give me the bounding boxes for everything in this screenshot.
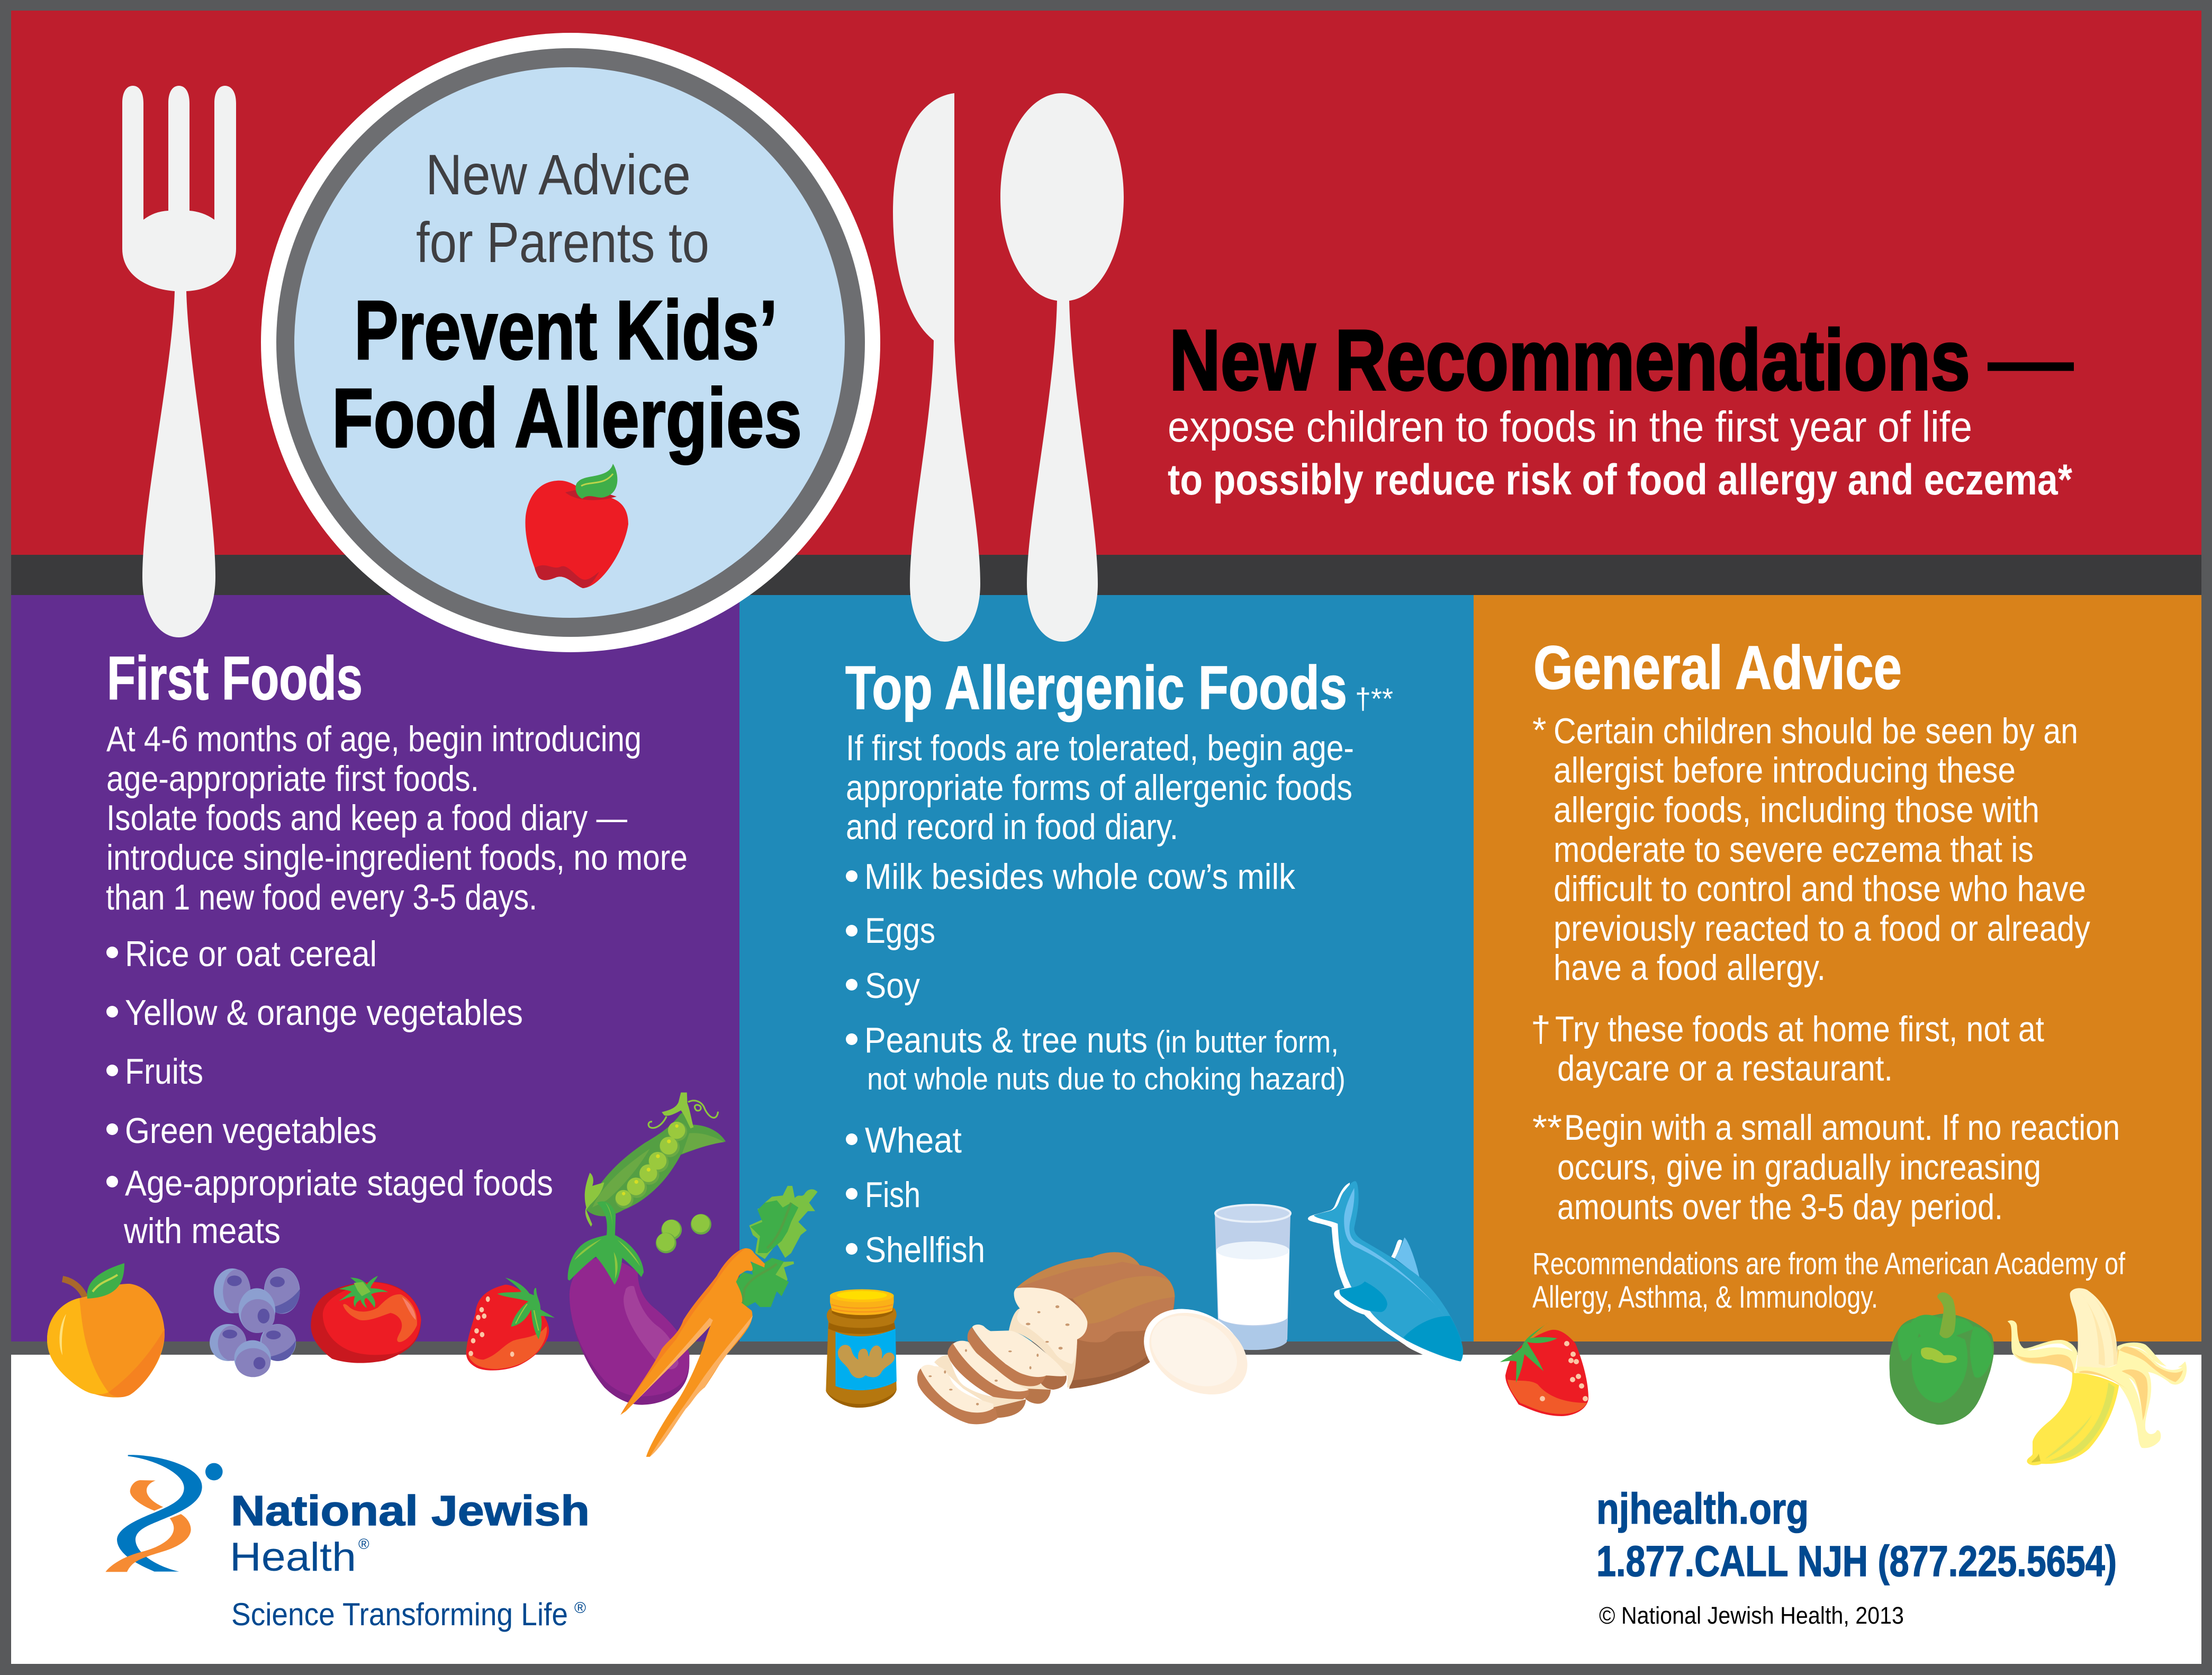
plate title: bold lines: Prevent Kids’	[354, 284, 778, 377]
contact block	[1596, 1485, 2117, 1629]
icon: banana	[2008, 1288, 2187, 1465]
note: certain children: allergist before introducing these	[1554, 750, 2016, 790]
logo mark	[105, 1455, 223, 1572]
note: certain children: previously reacted to a food or already	[1554, 908, 2090, 949]
subheading: to possibly reduce risk of food allergy and eczema*	[1168, 456, 2072, 504]
note: try at home: †	[1531, 1009, 1551, 1049]
icon: apple	[525, 464, 628, 588]
bullet list: allergenic foods	[846, 857, 1346, 1270]
panel: general advice text	[1531, 633, 2126, 1314]
bullet list: allergenic foods: Milk besides whole cow’s milk	[864, 857, 1296, 897]
intro paragraph: and record in food diary.	[846, 807, 1178, 847]
bullet list: first foods: Green vegetables	[125, 1111, 377, 1151]
note: certain children	[1532, 710, 2090, 988]
intro paragraph: If first foods are tolerated, begin age-	[846, 728, 1354, 768]
panel background: general advice	[1474, 595, 2201, 1341]
note: try at home	[1531, 1009, 2044, 1088]
panel: first foods text	[106, 644, 688, 1251]
bullet list: first foods: Fruits	[125, 1051, 203, 1092]
bullet list: allergenic foods: not whole nuts due to choking hazard)	[867, 1062, 1346, 1096]
logo: national jewish health	[105, 1455, 590, 1632]
footer white area	[11, 1355, 2201, 1664]
icon: glass of milk	[1215, 1205, 1290, 1350]
icon: strawberry	[466, 1277, 555, 1371]
bullet list: first foods: Rice or oat cereal	[125, 934, 377, 974]
logo wordmark: National Jewish	[231, 1487, 590, 1534]
icon: peach	[47, 1263, 165, 1398]
note: certain children: moderate to severe eczema that is	[1554, 830, 2034, 870]
note: try at home: Try these foods at home first, not at	[1555, 1009, 2044, 1049]
bullet list: allergenic foods: Soy	[865, 966, 920, 1006]
icon: peanut butter jar	[826, 1289, 897, 1408]
tagline: Science Transforming Life	[231, 1597, 568, 1632]
panel: top allergenic foods text	[845, 653, 1393, 1270]
bullet list: allergenic foods: Eggs	[865, 911, 935, 951]
icon: carrot greens	[735, 1186, 817, 1308]
icon: egg	[1129, 1292, 1261, 1411]
panel background: first foods	[11, 595, 739, 1341]
icon: eggplant	[568, 1201, 689, 1405]
icon: pea pod	[585, 1093, 726, 1227]
logo wordmark second line: ®	[358, 1536, 369, 1552]
icon: fish	[1308, 1181, 1463, 1362]
bullet list: allergenic foods: Wheat	[865, 1120, 962, 1160]
intro paragraph: At 4-6 months of age, begin introducing	[106, 719, 642, 759]
header band: red	[11, 11, 2201, 555]
note: certain children: Certain children should be seen by an	[1554, 711, 2078, 751]
icon: knife	[893, 93, 980, 642]
note: certain children: *	[1532, 710, 1546, 750]
intro paragraph	[106, 719, 688, 917]
note: begin small: amounts over the 3-5 day period.	[1557, 1187, 2003, 1227]
icon: blueberries	[210, 1268, 300, 1377]
note: certain children: difficult to control and those who have	[1554, 869, 2086, 909]
icon: spoon	[1000, 93, 1124, 642]
source note: Allergy, Asthma, & Immunology.	[1532, 1280, 1878, 1314]
note: certain children: allergic foods, including those with	[1554, 790, 2039, 830]
icon: carrots	[620, 1248, 765, 1457]
plate title: bold lines: Food Allergies	[332, 372, 802, 465]
source note	[1532, 1247, 2126, 1314]
logo wordmark second line: Health	[230, 1535, 356, 1580]
heading: new recommendations: —	[1988, 312, 2074, 408]
heading: first foods: First Foods	[107, 644, 363, 713]
intro paragraph: appropriate forms of allergenic foods	[846, 768, 1352, 808]
heading: new recommendations: New Recommendations	[1169, 312, 1970, 408]
icon: bread slices	[917, 1325, 1067, 1424]
panel background: top allergenic foods	[739, 595, 1474, 1341]
icon: green pepper	[1890, 1292, 1994, 1425]
subheading: expose children to foods in the first year of life	[1168, 403, 1972, 451]
bullet list: first foods	[106, 934, 553, 1251]
intro paragraph	[846, 728, 1354, 847]
note: try at home: daycare or a restaurant.	[1557, 1048, 1893, 1088]
bullet list: first foods: Yellow & orange vegetables	[125, 993, 523, 1033]
intro paragraph: introduce single-ingredient foods, no more	[106, 837, 688, 878]
note: begin small: **	[1532, 1107, 1562, 1148]
plate title: regular lines: New Advice	[426, 142, 691, 206]
subheading	[1168, 403, 2072, 504]
copyright: © National Jewish Health, 2013	[1599, 1602, 1904, 1629]
heading: top allergenic foods: Top Allergenic Foods	[845, 653, 1347, 722]
bullet list: first foods: Age-appropriate staged foods	[125, 1163, 553, 1203]
bullet list: allergenic foods: (in butter form,	[1155, 1025, 1339, 1059]
intro paragraph: than 1 new food every 3-5 days.	[106, 877, 537, 917]
note: begin small: Begin with a small amount. If no reaction	[1564, 1107, 2120, 1148]
note: begin small: occurs, give in gradually increasing	[1557, 1147, 2041, 1187]
plate title: regular lines	[416, 142, 709, 274]
tagline: ®	[574, 1599, 586, 1617]
icon: fork	[122, 86, 236, 637]
plate with title	[261, 33, 880, 652]
bullet list: allergenic foods: Peanuts & tree nuts	[864, 1020, 1148, 1060]
intro paragraph: Isolate foods and keep a food diary —	[106, 798, 627, 838]
icon: bread loaf	[1009, 1252, 1175, 1389]
heading: top allergenic foods: †**	[1355, 682, 1393, 715]
plate title: bold lines	[332, 284, 802, 465]
icon: loose peas	[656, 1214, 711, 1253]
note: certain children: have a food allergy.	[1554, 948, 1826, 988]
bullet list: allergenic foods: Shellfish	[865, 1230, 985, 1270]
bullet list: allergenic foods: Fish	[865, 1175, 920, 1215]
intro paragraph: age-appropriate first foods.	[106, 759, 479, 799]
plate title: regular lines: for Parents to	[416, 210, 709, 274]
icon: tomato	[311, 1276, 421, 1363]
heading: general advice: General Advice	[1533, 633, 1902, 702]
icon: strawberry	[1500, 1322, 1588, 1416]
website: njhealth.org	[1596, 1485, 1809, 1533]
note: begin small	[1532, 1107, 2120, 1227]
bullet list: first foods: with meats	[123, 1211, 281, 1251]
